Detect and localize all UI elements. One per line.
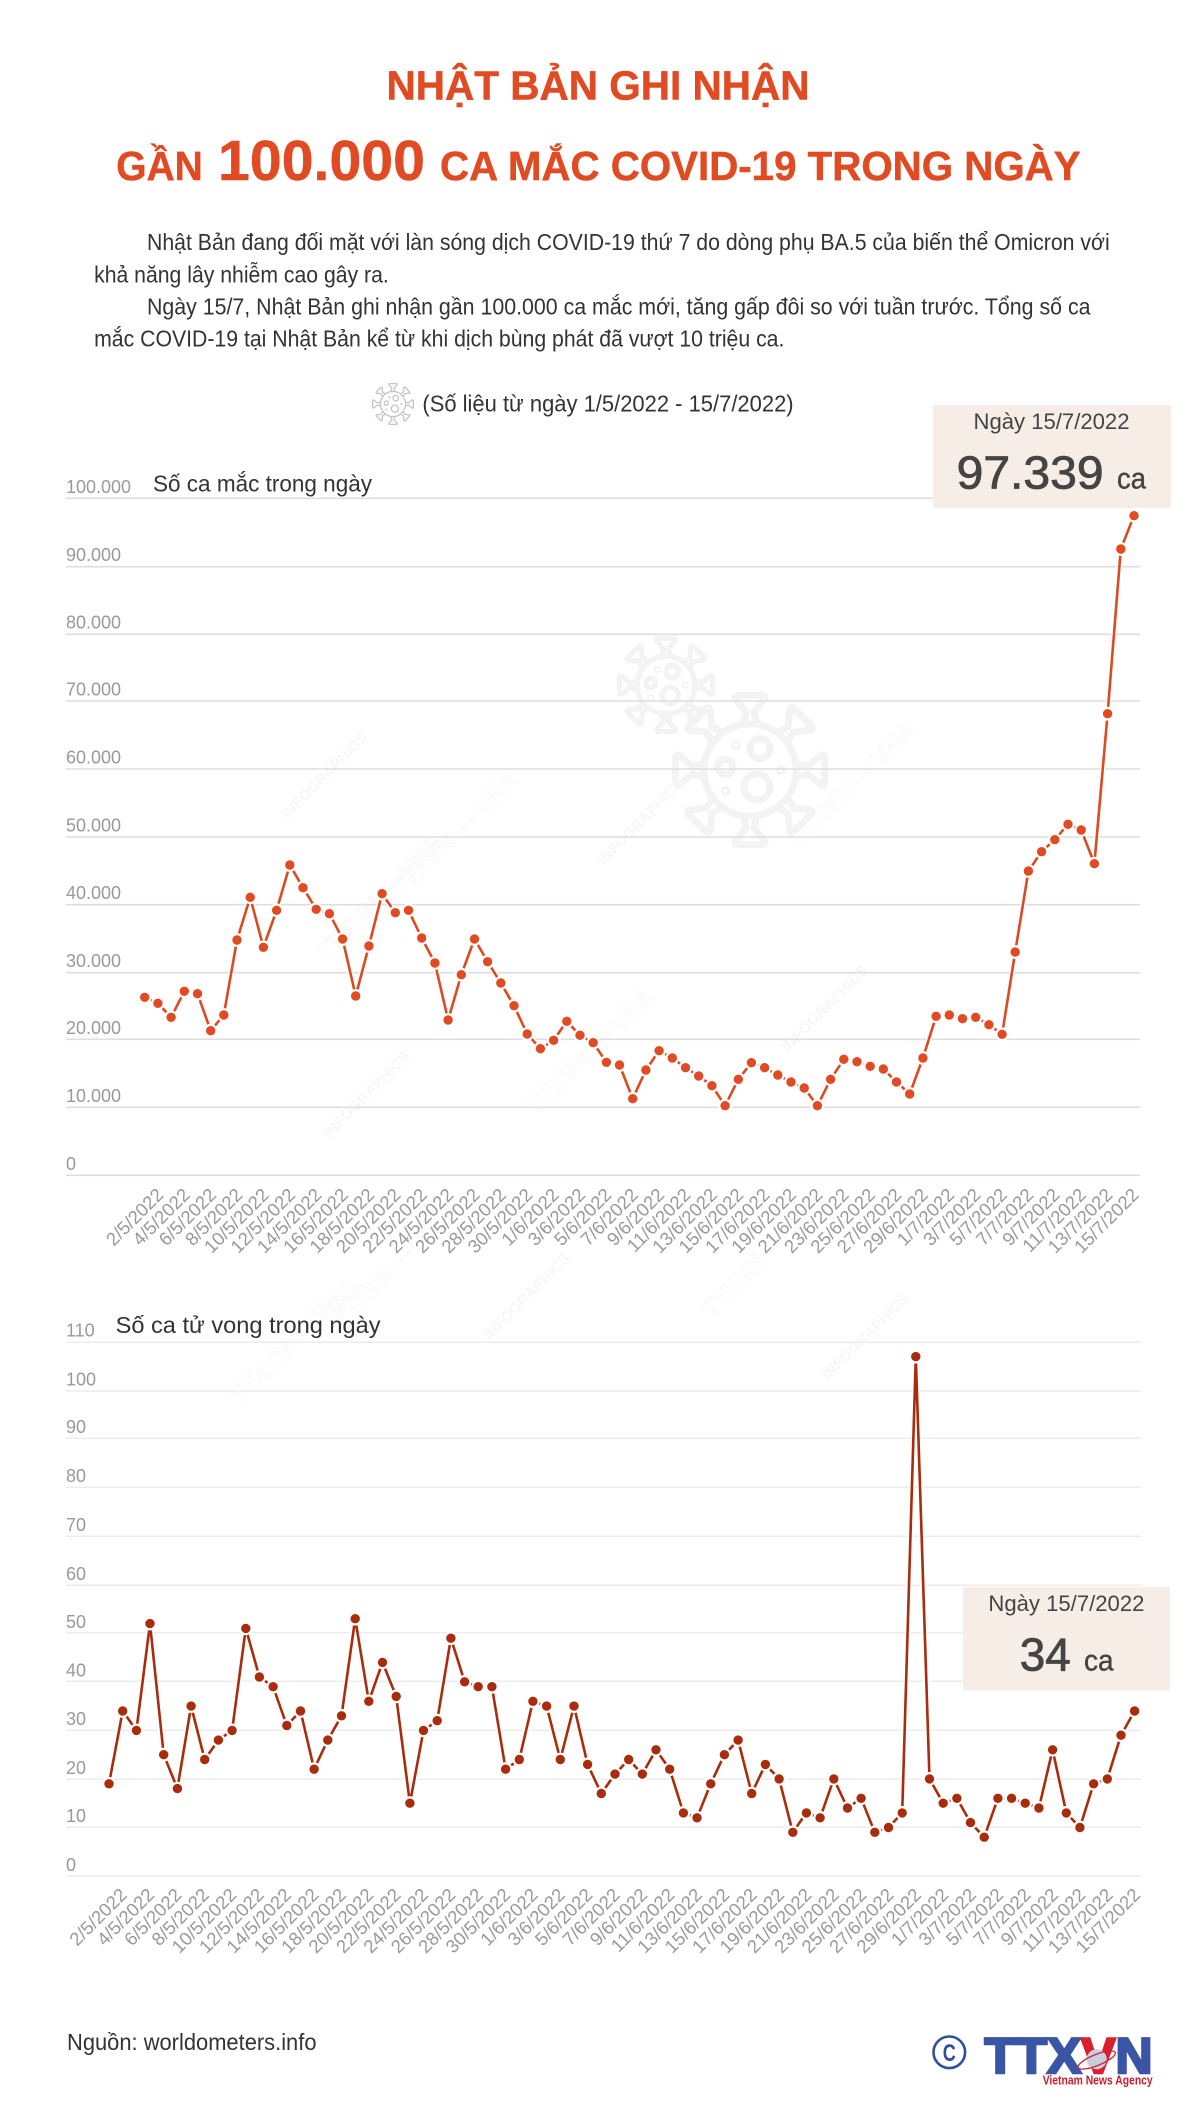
watermark: virus and agency marks: TTXVN — VNA — [224, 1273, 361, 1410]
chart 1 x axis labels: 13/6/2022 — [648, 1184, 721, 1257]
chart 2 y axis labels: 70 — [66, 1515, 86, 1535]
chart 1 x axis labels: 25/6/2022 — [806, 1184, 879, 1257]
chart: new cases per day — [66, 405, 1171, 1257]
chart 1 x axis labels: 29/6/2022 — [859, 1184, 932, 1257]
chart 2 gridlines — [66, 1342, 1142, 1876]
chart 1 x axis labels: 13/7/2022 — [1043, 1184, 1116, 1257]
chart 1 x axis labels: 19/6/2022 — [727, 1184, 800, 1257]
chart 2 x axis labels: 5/7/2022 — [942, 1884, 1007, 1950]
chart 2 y axis labels: 110 — [66, 1321, 95, 1341]
watermark: virus and agency marks: INFOGRAPHICS — [480, 1250, 573, 1343]
chart 2 x axis labels: 21/6/2022 — [743, 1884, 816, 1957]
chart 1 x axis labels: 18/5/2022 — [305, 1184, 378, 1257]
chart 1 y axis labels: 100.000 — [66, 477, 131, 497]
chart 1 y axis labels: 20.000 — [66, 1018, 121, 1038]
title: NHẬT BẢN GHI NHẬN — [386, 62, 810, 108]
chart 2 x axis labels: 9/7/2022 — [996, 1884, 1062, 1950]
callout: 34 deaths on 15/7/2022: Ngày 15/7/2022 — [988, 1591, 1144, 1616]
chart 2 x axis labels: 15/6/2022 — [660, 1884, 733, 1957]
chart 1 x axis labels: 14/5/2022 — [253, 1184, 326, 1257]
callout: 97.339 cases on 15/7/2022 — [933, 405, 1171, 508]
intro text block: mắc COVID-19 tại Nhật Bản kể từ khi dịch bùng phát đã vượt 10 triệu ca. — [94, 326, 784, 352]
watermark: virus and agency marks: TTXVN — VNA — [522, 983, 659, 1120]
chart 2 x axis labels: 22/5/2022 — [332, 1884, 405, 1957]
logo: TTXVN Vietnam News Agency — [934, 2027, 1153, 2088]
chart 1 x axis labels: 23/6/2022 — [780, 1184, 853, 1257]
callout: 34 deaths on 15/7/2022: ca — [1084, 1645, 1114, 1678]
chart 2 y axis labels: 40 — [66, 1660, 86, 1680]
date range note: (Số liệu từ ngày 1/5/2022 - 15/7/2022) — [422, 391, 794, 417]
chart 1 x axis labels: 17/6/2022 — [701, 1184, 774, 1257]
chart 2 x axis labels: 27/6/2022 — [825, 1884, 898, 1957]
watermark: virus and agency marks: TTXVN — VNA — [386, 766, 523, 903]
chart 1 gridlines — [66, 498, 1140, 1175]
title: CA MẮC COVID-19 TRONG NGÀY — [440, 143, 1081, 189]
chart 1 y axis labels: 0 — [66, 1154, 76, 1174]
watermark: virus and agency marks — [224, 638, 921, 1410]
chart 1 heading: Số ca mắc trong ngày — [153, 471, 372, 497]
chart 2 x axis labels: 13/6/2022 — [633, 1884, 706, 1957]
callout: 34 deaths on 15/7/2022 — [963, 1587, 1170, 1690]
tagline: Vietnam News Agency — [1043, 2074, 1153, 2088]
chart 1 x axis labels: 28/5/2022 — [437, 1184, 510, 1257]
chart 1 x axis labels: 10/5/2022 — [200, 1184, 273, 1257]
chart 2 y axis labels: 0 — [66, 1855, 76, 1875]
watermark: virus and agency marks: INFOGRAPHICS — [778, 962, 871, 1055]
chart 2 data line — [109, 1357, 1135, 1837]
chart 1 x axis labels: 6/5/2022 — [154, 1184, 220, 1250]
watermark: virus and agency marks: TTXVN — VNA — [784, 716, 921, 853]
source note: Nguồn: worldometers.info — [67, 2029, 316, 2055]
intro text block — [94, 229, 1110, 352]
chart 2 y axis labels: 10 — [66, 1806, 86, 1826]
icon: virus — [373, 384, 413, 424]
chart 2 x axis labels: 17/6/2022 — [688, 1884, 761, 1957]
chart 2 x axis labels: 11/6/2022 — [607, 1884, 679, 1956]
chart 2 y axis labels: 100 — [66, 1370, 96, 1390]
chart 1 x axis labels: 24/5/2022 — [384, 1184, 457, 1257]
chart 1 x axis labels: 20/5/2022 — [332, 1184, 405, 1257]
chart 2 x axis labels: 1/7/2022 — [887, 1884, 953, 1950]
chart 2 x axis labels: 3/6/2022 — [503, 1884, 569, 1950]
chart 2 y axis labels: 60 — [66, 1564, 86, 1584]
chart 1 y axis labels: 80.000 — [66, 613, 121, 633]
chart 2 x axis labels: 28/5/2022 — [414, 1884, 487, 1957]
chart 2 x axis labels: 14/5/2022 — [222, 1884, 295, 1957]
watermark: virus and agency marks: TTXVN — VNA — [696, 1186, 833, 1323]
wordmark: TTXVN — [984, 2027, 1152, 2084]
chart 1 data line — [145, 516, 1134, 1106]
callout: 97.339 cases on 15/7/2022: Ngày 15/7/2022 — [974, 409, 1130, 434]
chart 1 y axis labels: 70.000 — [66, 680, 121, 700]
chart 2 x axis labels: 19/6/2022 — [715, 1884, 788, 1957]
chart 2 x axis labels: 12/5/2022 — [195, 1884, 268, 1957]
chart 2 x axis labels — [65, 1884, 1144, 1957]
callout: 97.339 cases on 15/7/2022: 97.339 — [957, 446, 1104, 498]
chart 1 x axis labels: 12/5/2022 — [226, 1184, 299, 1257]
chart 2 y axis labels: 90 — [66, 1417, 86, 1437]
chart 1 x axis labels: 26/5/2022 — [411, 1184, 484, 1257]
chart 1 x axis labels: 11/7/2022 — [1018, 1184, 1090, 1256]
chart 1 x axis labels: 2/5/2022 — [102, 1184, 167, 1250]
chart 1 x axis labels: 21/6/2022 — [753, 1184, 826, 1257]
watermark: virus and agency marks: TTXVN — VNA — [326, 1196, 463, 1333]
chart 1 x axis labels: 15/7/2022 — [1070, 1184, 1143, 1257]
chart 1 x axis labels: 30/5/2022 — [463, 1184, 536, 1257]
chart 1 x axis labels: 27/6/2022 — [832, 1184, 906, 1257]
title: 100.000 — [218, 129, 425, 193]
chart 2 x axis labels: 11/7/2022 — [1017, 1884, 1090, 1956]
chart 2 x axis labels: 7/7/2022 — [969, 1884, 1035, 1950]
callout: 97.339 cases on 15/7/2022: ca — [1117, 462, 1146, 495]
chart 1 y axis labels: 90.000 — [66, 545, 121, 565]
title — [116, 62, 1081, 193]
chart 2 x axis labels: 16/5/2022 — [249, 1884, 323, 1957]
watermark: virus and agency marks: INFOGRAPHICS — [594, 775, 687, 868]
chart 1 x axis labels — [102, 1184, 1143, 1257]
chart 2 x axis labels: 7/6/2022 — [558, 1884, 624, 1950]
chart 2 x axis labels: 24/5/2022 — [359, 1884, 432, 1957]
chart 2 x axis labels: 25/6/2022 — [797, 1884, 870, 1957]
chart 2 x axis labels: 29/6/2022 — [852, 1884, 925, 1957]
chart 2 x axis labels: 9/6/2022 — [585, 1884, 651, 1950]
chart 1 x axis labels: 1/7/2022 — [892, 1184, 958, 1250]
intro text block: khả năng lây nhiễm cao gây ra. — [94, 262, 389, 288]
chart 1 x axis labels: 7/7/2022 — [972, 1184, 1037, 1250]
chart 1 x axis labels: 9/7/2022 — [998, 1184, 1064, 1250]
chart 2 x axis labels: 6/5/2022 — [120, 1884, 186, 1950]
chart 2 y axis labels: 50 — [66, 1612, 86, 1632]
chart 1 y axis labels: 30.000 — [66, 951, 121, 971]
chart 1 x axis labels: 3/7/2022 — [919, 1184, 985, 1250]
chart 1 y axis labels: 40.000 — [66, 883, 121, 903]
watermark: virus and agency marks: TTXVN — VNA — [311, 829, 448, 966]
chart 2 y axis labels: 80 — [66, 1466, 86, 1486]
chart 1 y axis labels: 50.000 — [66, 816, 121, 836]
chart 1 data points — [139, 510, 1140, 1111]
chart 1 x axis labels: 7/6/2022 — [576, 1184, 642, 1250]
watermark: virus and agency marks: INFOGRAPHICS — [819, 1290, 912, 1383]
chart 1 x axis labels: 8/5/2022 — [181, 1184, 247, 1250]
chart: deaths per day — [65, 1312, 1170, 1957]
chart 1 y axis labels: 10.000 — [66, 1086, 121, 1106]
chart 2 heading: Số ca tử vong trong ngày — [116, 1312, 381, 1338]
icon: copyright mark: C — [943, 2040, 956, 2067]
intro text block: Nhật Bản đang đối mặt với làn sóng dịch COVID-19 thứ 7 do dòng phụ BA.5 của biến thể Omicron với — [147, 229, 1110, 255]
chart 2 y axis labels: 20 — [66, 1758, 86, 1778]
chart 2 x axis labels: 15/7/2022 — [1071, 1884, 1144, 1957]
chart 1 x axis labels: 5/6/2022 — [550, 1184, 616, 1250]
chart 1 x axis labels: 4/5/2022 — [128, 1184, 194, 1250]
chart 2 x axis labels: 10/5/2022 — [167, 1884, 240, 1957]
callout: 34 deaths on 15/7/2022: 34 — [1020, 1629, 1071, 1681]
chart 1 x axis labels: 5/7/2022 — [945, 1184, 1011, 1250]
watermark: virus and agency marks: INFOGRAPHICS — [278, 729, 371, 822]
chart 1 x axis labels: 15/6/2022 — [674, 1184, 747, 1257]
chart 1 x axis labels: 22/5/2022 — [358, 1184, 431, 1257]
icon: globe and orbit — [1076, 2047, 1117, 2073]
chart 2 x axis labels: 20/5/2022 — [304, 1884, 377, 1957]
chart 2 x axis labels: 8/5/2022 — [147, 1884, 213, 1950]
chart 1 x axis labels: 11/6/2022 — [623, 1184, 695, 1256]
chart 2 x axis labels: 30/5/2022 — [441, 1884, 514, 1957]
chart 2 x axis labels: 3/7/2022 — [914, 1884, 980, 1950]
chart 2 x axis labels: 23/6/2022 — [770, 1884, 843, 1957]
chart 1 x axis labels: 3/6/2022 — [523, 1184, 589, 1250]
chart 1 y axis labels: 60.000 — [66, 748, 121, 768]
chart 2 data points — [103, 1351, 1140, 1843]
chart 2 x axis labels: 5/6/2022 — [531, 1884, 596, 1950]
chart 2 x axis labels: 4/5/2022 — [92, 1884, 158, 1950]
chart 2 x axis labels: 13/7/2022 — [1044, 1884, 1117, 1957]
intro text block: Ngày 15/7, Nhật Bản ghi nhận gần 100.000 ca mắc mới, tăng gấp đôi so với tuần trước. Tổng số ca — [147, 293, 1091, 319]
chart 1 x axis labels: 9/6/2022 — [602, 1184, 668, 1250]
chart 1 x axis labels: 1/6/2022 — [497, 1184, 563, 1250]
chart 1 x axis labels: 16/5/2022 — [279, 1184, 352, 1257]
chart 2 x axis labels: 2/5/2022 — [65, 1884, 131, 1950]
title: GẦN — [116, 143, 203, 189]
chart 2 x axis labels: 26/5/2022 — [386, 1884, 460, 1957]
chart 2 x axis labels: 1/6/2022 — [476, 1884, 542, 1950]
watermark: virus and agency marks: INFOGRAPHICS — [320, 1048, 413, 1141]
chart 2 y axis labels: 30 — [66, 1709, 86, 1729]
icon: copyright mark — [934, 2036, 965, 2068]
chart 2 y axis labels — [66, 1321, 96, 1875]
chart 2 x axis labels: 18/5/2022 — [277, 1884, 350, 1957]
chart 1 y axis labels — [66, 477, 131, 1174]
